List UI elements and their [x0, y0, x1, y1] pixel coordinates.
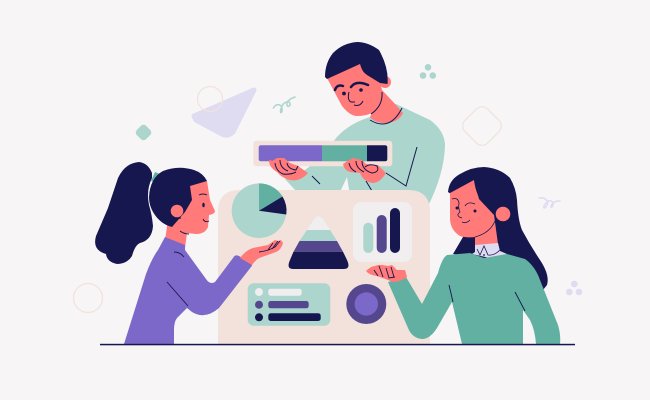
decorative background shapes — [74, 64, 582, 312]
man's hands — [269, 158, 386, 183]
sweater — [388, 253, 560, 344]
woman in purple sweater — [95, 162, 283, 344]
ground line — [100, 344, 575, 345]
neck and face — [450, 180, 498, 246]
legend card — [248, 283, 330, 326]
ponytail — [95, 162, 153, 264]
progress bar held by man — [253, 141, 392, 166]
pie chart — [232, 183, 287, 238]
collar — [472, 243, 507, 259]
donut chart — [346, 284, 386, 324]
long hair — [448, 167, 548, 290]
man in mint sweater — [285, 42, 445, 208]
bar chart card — [353, 202, 412, 262]
hand — [240, 240, 283, 265]
arm and body — [124, 237, 252, 344]
panel: presentation board — [218, 183, 430, 345]
pyramid chart — [289, 216, 348, 269]
hair tie — [151, 172, 160, 182]
hand — [366, 265, 407, 282]
woman in teal sweater — [366, 167, 560, 344]
neck and face — [165, 180, 215, 248]
